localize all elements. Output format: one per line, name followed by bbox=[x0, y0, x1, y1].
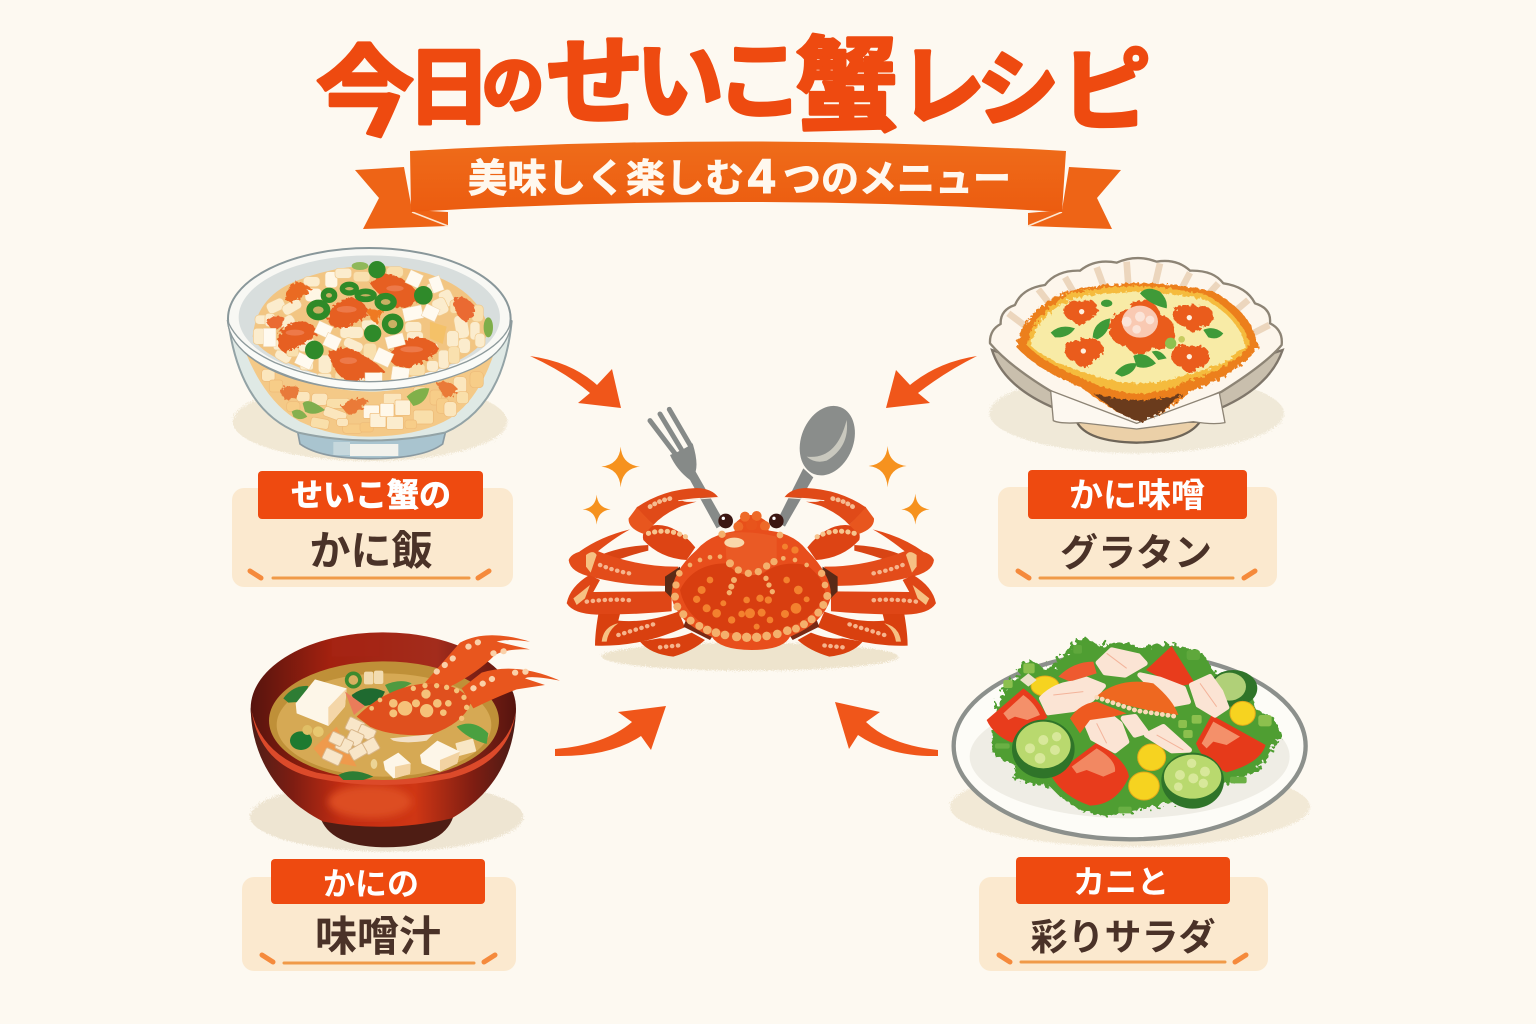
shell spots bbox=[693, 544, 810, 630]
label: salad bbox=[979, 857, 1268, 971]
dish name: グラタン bbox=[1060, 533, 1212, 575]
label corner marks bbox=[262, 955, 495, 962]
title: 蟹 bbox=[796, 30, 898, 144]
center crab with cutlery bbox=[567, 398, 936, 671]
orange flowers bbox=[1064, 300, 1213, 373]
icon: fork bbox=[650, 409, 725, 528]
title: シ bbox=[977, 45, 1059, 136]
crab meat chunks bbox=[266, 275, 475, 383]
crab meat topping bbox=[1079, 306, 1192, 359]
label tag bbox=[1016, 857, 1230, 904]
corn bbox=[1031, 676, 1255, 800]
arrow: miso soup to crab bbox=[555, 706, 666, 756]
label: miso soup bbox=[242, 859, 516, 971]
ribbon tail left bbox=[355, 167, 448, 229]
dish: crab miso gratin bbox=[989, 258, 1284, 453]
crab meat bbox=[322, 716, 380, 766]
burnt bottom bbox=[1093, 393, 1183, 422]
crab meat bbox=[1042, 650, 1227, 751]
label tag bbox=[271, 859, 485, 904]
tag text: かにの bbox=[323, 866, 419, 902]
lettuce highlights bbox=[995, 645, 1272, 813]
crab shadow bbox=[602, 643, 898, 671]
arrow: salad to crab bbox=[835, 702, 938, 756]
green rings and peas bbox=[305, 261, 493, 359]
gratin crust bbox=[1016, 283, 1258, 422]
crab legs right bbox=[784, 488, 936, 657]
tag text: せいこ蟹の bbox=[291, 477, 451, 513]
label corner marks bbox=[250, 571, 489, 578]
title: の bbox=[482, 52, 544, 121]
label corner marks bbox=[999, 955, 1246, 962]
label underline bbox=[284, 962, 474, 964]
left claw bbox=[643, 525, 695, 560]
label tag bbox=[258, 471, 483, 519]
ribbon body bbox=[410, 142, 1066, 212]
label panel bbox=[998, 487, 1277, 587]
plate bbox=[954, 653, 1306, 839]
scallop shell bbox=[990, 258, 1282, 428]
ribbon banner bbox=[355, 142, 1121, 229]
title: こ bbox=[717, 34, 803, 130]
dish name: 彩りサラダ bbox=[1030, 917, 1216, 958]
bowl foot bbox=[297, 430, 446, 459]
dish: crab rice bowl bbox=[227, 248, 512, 461]
bowl foot bbox=[320, 817, 453, 847]
title: ピ bbox=[1061, 42, 1151, 142]
shell underside bbox=[992, 350, 1283, 408]
green leaf tips bbox=[1020, 673, 1037, 687]
crab legs left bbox=[567, 488, 718, 657]
title: せ bbox=[546, 27, 644, 137]
label panel bbox=[979, 877, 1268, 971]
label tag bbox=[1028, 470, 1247, 519]
title: 今 bbox=[316, 38, 414, 148]
ribbon tail right bbox=[1028, 167, 1121, 229]
title: い bbox=[636, 32, 724, 131]
icon: sparkles bbox=[583, 446, 930, 525]
soup greens bbox=[283, 673, 488, 780]
icon: spoon bbox=[777, 398, 865, 527]
shadow bbox=[989, 373, 1284, 453]
crab shell bbox=[671, 511, 831, 650]
bowl interior bbox=[239, 255, 500, 379]
lacquer bowl body bbox=[251, 708, 516, 827]
label: crab miso gratin bbox=[998, 470, 1277, 587]
banner text: つのメニュー bbox=[783, 159, 1011, 201]
rice bbox=[253, 261, 493, 383]
shadow bbox=[233, 382, 507, 461]
label underline bbox=[1040, 576, 1233, 580]
label underline bbox=[1021, 960, 1225, 964]
label: crab rice bbox=[232, 471, 513, 587]
label corner marks bbox=[1018, 571, 1255, 578]
dish name: かに飯 bbox=[310, 528, 432, 574]
miso soup bbox=[269, 661, 499, 780]
label underline bbox=[273, 576, 469, 580]
arrow: gratin to crab bbox=[886, 356, 977, 408]
crab eyes bbox=[718, 514, 784, 528]
dish: crab salad bbox=[950, 637, 1310, 847]
paper flap bbox=[1051, 391, 1225, 429]
tag text: カニと bbox=[1073, 864, 1169, 900]
front rim glass bbox=[227, 320, 512, 390]
corn and veg bbox=[302, 671, 476, 769]
crab claw bbox=[345, 635, 560, 742]
bowl body highlight bbox=[328, 785, 412, 818]
lettuce bbox=[992, 637, 1282, 817]
golden crust bbox=[1027, 286, 1250, 393]
shell bead rim bbox=[671, 531, 831, 642]
cucumbers bbox=[1012, 670, 1257, 809]
title: 日 bbox=[407, 41, 491, 135]
dish name: 味噌汁 bbox=[315, 913, 441, 960]
shadow bbox=[950, 767, 1310, 847]
bowl rim bbox=[251, 632, 516, 784]
tag text: かに味噌 bbox=[1069, 477, 1205, 515]
shadow bbox=[250, 782, 523, 852]
arrow: rice bowl to crab bbox=[530, 356, 621, 408]
tomatoes bbox=[987, 646, 1266, 806]
melted cheese bbox=[1030, 292, 1245, 383]
ribbon folds bbox=[412, 212, 1062, 226]
banner text: 美味しく楽しむ bbox=[468, 158, 745, 201]
tofu bbox=[296, 679, 460, 778]
food through glass bbox=[246, 353, 494, 437]
leg speckles bbox=[587, 565, 683, 647]
dish base bbox=[1077, 422, 1200, 443]
banner text: 4 bbox=[748, 151, 775, 204]
glass body bbox=[228, 322, 512, 440]
tofu cubes bbox=[263, 270, 444, 382]
title: レ bbox=[899, 39, 985, 135]
dish: crab miso soup bbox=[250, 632, 560, 852]
herbs bbox=[1051, 289, 1223, 377]
label panel bbox=[242, 877, 516, 971]
label panel bbox=[232, 488, 513, 587]
glass rim bbox=[228, 248, 511, 389]
